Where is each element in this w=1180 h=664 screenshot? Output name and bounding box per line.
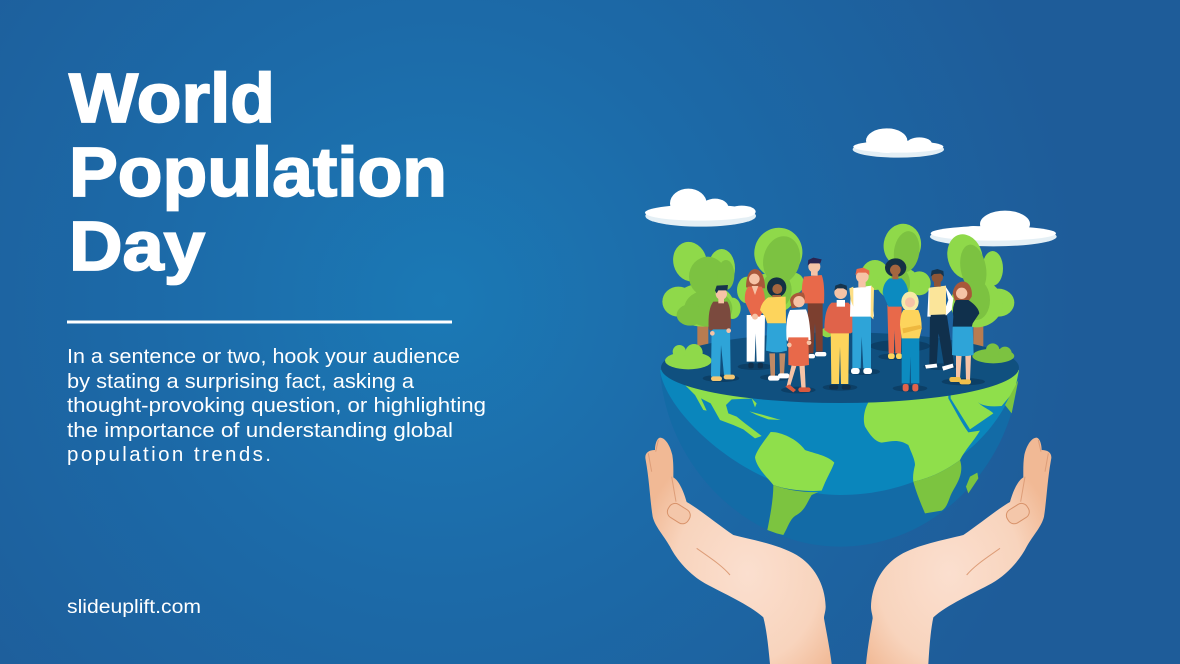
title underline <box>67 320 452 324</box>
intro paragraph: population trends. <box>67 443 271 466</box>
person: woman in orange and white <box>745 269 765 368</box>
continent: africa lit <box>864 390 980 482</box>
person: man in orange behind <box>802 258 826 358</box>
intro paragraph: the importance of understanding global <box>67 419 453 442</box>
website: slideuplift.com <box>67 597 201 618</box>
intro paragraph: by stating a surprising fact, asking a <box>67 370 415 393</box>
ground shadows <box>703 340 985 393</box>
caribbean islands <box>749 398 781 420</box>
person: man in brown <box>709 285 735 381</box>
person: woman in blue and orange <box>883 258 908 359</box>
continent: north america <box>685 370 762 438</box>
continent: arabia <box>951 370 1019 429</box>
scene on top of globe <box>645 128 1057 403</box>
tree back left <box>737 222 808 314</box>
person: woman in white and red <box>785 292 811 392</box>
person: blonde woman in yellow <box>900 292 922 391</box>
person: woman in yellow and blue <box>760 277 789 381</box>
tree right <box>942 230 1014 353</box>
island deck <box>661 332 1019 403</box>
globe hemisphere <box>660 370 1019 547</box>
bush right <box>972 343 1014 363</box>
cloud left <box>645 189 756 227</box>
bush middle <box>821 327 833 337</box>
continent: africa shaded <box>913 460 961 513</box>
right hand <box>866 438 1051 664</box>
cloud right <box>930 211 1057 246</box>
intro paragraph: thought-provoking question, or highlighting <box>67 394 486 417</box>
person: man in cream vest <box>925 269 954 371</box>
intro paragraph <box>67 345 486 466</box>
title: Day <box>69 207 205 285</box>
person: man in white and blue <box>849 268 874 374</box>
globe shaded base <box>660 370 1019 547</box>
intro paragraph: In a sentence or two, hook your audience <box>67 345 460 368</box>
person: man in red sweater and yellow trousers <box>824 284 856 390</box>
bush left <box>665 344 712 369</box>
tree back right <box>861 221 931 300</box>
title: Population <box>69 133 447 211</box>
person: woman in navy and blue <box>949 282 979 384</box>
continent: south america shaded <box>767 485 818 535</box>
continent: south america lit <box>755 432 834 491</box>
left hand <box>645 438 832 664</box>
tree left <box>662 238 741 356</box>
madagascar <box>966 473 978 493</box>
globe lit ocean <box>660 370 1019 495</box>
title: World <box>69 59 275 137</box>
title <box>69 59 447 285</box>
cloud top <box>853 128 944 158</box>
